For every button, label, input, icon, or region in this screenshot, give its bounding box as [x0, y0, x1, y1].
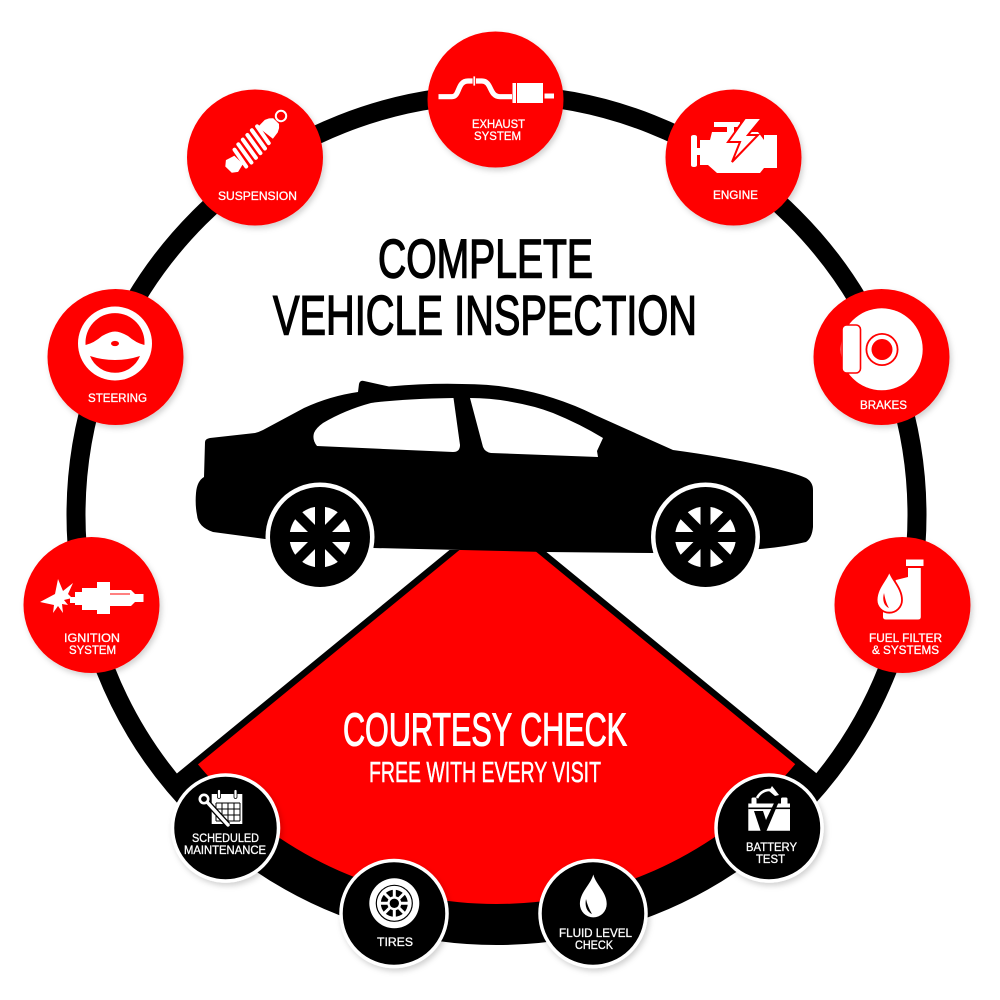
badge: battery test: [716, 775, 822, 881]
icon: steering wheel: [78, 306, 152, 380]
icon: fluid drop: [580, 874, 607, 917]
badge: ignition system: [24, 537, 160, 673]
badge: fluid level check: [540, 860, 646, 966]
label: exhaust system: EXHAUST: [472, 117, 525, 131]
icon: engine with lightning bolt: [691, 118, 777, 173]
icon: fuel bottle and drop: [877, 560, 924, 620]
label: battery test: BATTERY: [746, 840, 797, 854]
badge: scheduled maintenance: [172, 775, 278, 881]
car windows: [313, 398, 603, 457]
label: exhaust system: [472, 117, 525, 143]
label: scheduled maintenance: SCHEDULED: [192, 831, 259, 845]
label: fuel filter and systems: FUEL FILTER: [869, 631, 942, 645]
label: battery test: [746, 840, 797, 866]
icon: battery with check mark: [748, 786, 790, 832]
label: fluid level check: CHECK: [575, 938, 614, 952]
badge: tires: [341, 860, 447, 966]
label: battery test: TEST: [756, 852, 785, 866]
rear wheel: [266, 482, 374, 592]
badge: steering: [48, 289, 184, 425]
badge: fuel filter and systems: [834, 537, 970, 673]
label: scheduled maintenance: MAINTENANCE: [184, 843, 266, 857]
label: ignition system: SYSTEM: [69, 643, 116, 657]
badge: exhaust system: [428, 32, 564, 168]
icon: tire: [369, 878, 419, 928]
title: COMPLETE: [378, 228, 593, 290]
label: engine: ENGINE: [713, 188, 758, 202]
label: brakes: BRAKES: [860, 398, 907, 412]
label: suspension: SUSPENSION: [218, 189, 297, 203]
label: fuel filter and systems: & SYSTEMS: [872, 643, 939, 657]
courtesy check heading: COURTESY CHECK: [343, 704, 627, 756]
label: fluid level check: FLUID LEVEL: [559, 926, 632, 940]
badge: brakes: [814, 289, 950, 425]
title: [273, 228, 697, 346]
title: VEHICLE INSPECTION: [273, 284, 697, 346]
icon: shock absorber: [221, 105, 293, 178]
inspection ring: [76, 94, 917, 936]
icon: exhaust pipe: [438, 76, 554, 103]
icon: calendar and wrench: [200, 790, 242, 825]
label: fuel filter and systems: [869, 631, 942, 657]
label: steering: STEERING: [88, 391, 147, 405]
panel: courtesy check sector: [177, 550, 816, 926]
label: exhaust system: SYSTEM: [474, 129, 521, 143]
label: tires: TIRES: [377, 935, 413, 949]
badge: engine: [666, 90, 802, 226]
icon: brake disc: [841, 308, 923, 390]
icon: spark plug: [40, 579, 144, 614]
label: scheduled maintenance: [184, 831, 266, 857]
car silhouette: [196, 381, 813, 592]
courtesy check subheading: FREE WITH EVERY VISIT: [369, 757, 601, 789]
courtesy check text: [343, 704, 627, 789]
front wheel: [651, 482, 760, 592]
badge: suspension: [187, 90, 323, 226]
label: ignition system: IGNITION: [64, 631, 120, 645]
label: ignition system: [64, 631, 120, 657]
label: fluid level check: [559, 926, 632, 952]
